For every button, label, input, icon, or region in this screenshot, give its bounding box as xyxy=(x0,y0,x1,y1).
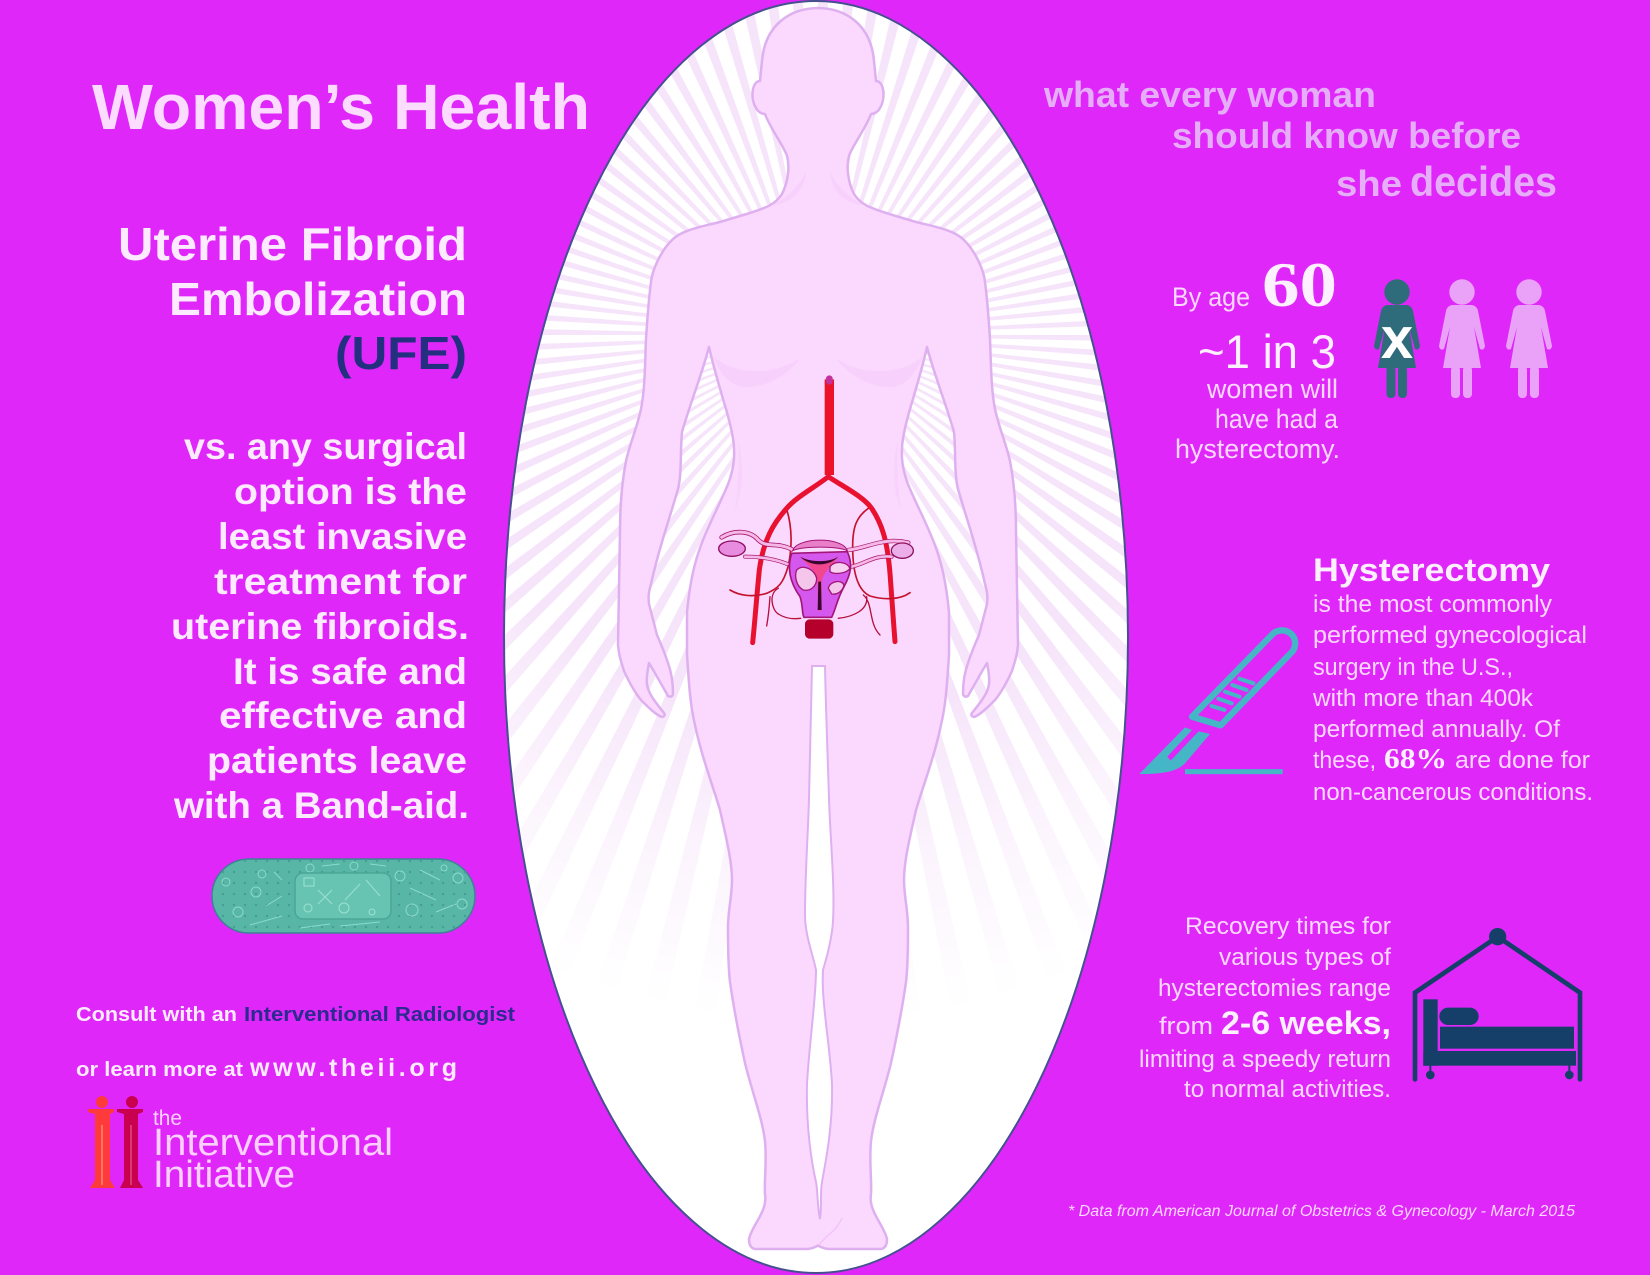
paragraph: least invasive: It is safe and xyxy=(233,651,467,692)
anatomy: aorta, arteries and uterus xyxy=(719,379,913,643)
fallopian tubes xyxy=(722,532,908,567)
body silhouette xyxy=(618,8,1018,1249)
uterus dome xyxy=(793,540,847,551)
logo: the Interventional Initiative xyxy=(88,1096,393,1196)
statistic: 1 in 3: 60 xyxy=(1262,249,1337,320)
text: recovery times: to normal activities. xyxy=(1184,1076,1391,1103)
text: hysterectomy facts: non-cancerous conditions. xyxy=(1313,779,1593,806)
text: hysterectomy facts: Hysterectomy xyxy=(1313,552,1550,588)
gap between the legs xyxy=(805,666,833,1219)
tagline: decides xyxy=(1410,158,1557,205)
text: recovery times xyxy=(1139,913,1391,1103)
statistic: 1 in 3: By age xyxy=(1172,282,1250,312)
logo figures xyxy=(88,1096,143,1188)
icon: scalpel xyxy=(1139,630,1295,774)
cervix xyxy=(805,619,833,639)
text: recovery times: hysterectomies range xyxy=(1158,975,1391,1002)
text: recovery times: from xyxy=(1159,1013,1213,1040)
woman 1: x xyxy=(1381,306,1413,371)
uterine cavity xyxy=(800,557,838,611)
paragraph: least invasive: option is the xyxy=(234,471,467,512)
central oval panel xyxy=(503,0,1129,1274)
heading: UFE: Uterine Fibroid xyxy=(118,218,467,270)
tagline: should know before xyxy=(1172,115,1521,156)
statistic: 1 in 3: have had a xyxy=(1215,404,1339,434)
tagline: what every woman xyxy=(1043,74,1376,115)
paragraph: least invasive: effective and xyxy=(219,695,467,736)
heading: UFE xyxy=(118,218,467,379)
text: hysterectomy facts: performed gynecological xyxy=(1313,622,1587,649)
text: hysterectomy facts xyxy=(1312,552,1593,806)
foot detail xyxy=(819,1218,842,1245)
call to action: Consult with an xyxy=(76,1003,237,1026)
tagline: she xyxy=(1336,163,1402,204)
paragraph: least invasive: least invasive xyxy=(218,516,467,557)
chest and neck shading xyxy=(713,172,923,387)
text: hysterectomy facts: surgery in the U.S., xyxy=(1313,654,1513,681)
text: recovery times: 2-6 weeks, xyxy=(1221,1005,1391,1041)
text: hysterectomy facts: performed annually. Of xyxy=(1313,716,1560,743)
logo: the Interventional Initiative: Initiative xyxy=(153,1154,295,1196)
woman 1 xyxy=(1374,279,1420,398)
text: recovery times: limiting a speedy return xyxy=(1139,1046,1391,1073)
paragraph: least invasive: treatment for xyxy=(214,561,467,602)
logo: the Interventional Initiative: Interventional xyxy=(153,1122,393,1164)
icon: hospital bed xyxy=(1415,928,1580,1079)
icon: band-aid xyxy=(212,859,475,933)
uterus body xyxy=(790,552,851,617)
text: hysterectomy facts: 68% xyxy=(1384,743,1447,775)
paragraph: least invasive: vs. any surgical xyxy=(184,426,467,467)
hip shading xyxy=(735,440,901,510)
ovaries xyxy=(719,541,745,556)
statistic: 1 in 3: ~1 in 3 xyxy=(1198,325,1336,378)
heading: UFE: (UFE) xyxy=(335,327,467,379)
logo: the Interventional Initiative: the xyxy=(153,1107,182,1130)
statistic: 1 in 3: women will xyxy=(1206,374,1338,404)
heading: UFE: Embolization xyxy=(169,273,467,325)
woman 2 xyxy=(1439,279,1485,398)
call to action: www.theii.org xyxy=(249,1054,457,1082)
paragraph: least invasive: with a Band-aid. xyxy=(173,785,469,826)
title: Women’s Health xyxy=(92,71,590,143)
text: hysterectomy facts: these, xyxy=(1313,747,1376,774)
text: hysterectomy facts: are done for xyxy=(1455,747,1590,774)
tagline xyxy=(1043,74,1557,205)
paragraph: least invasive xyxy=(171,426,469,826)
call to action xyxy=(76,1003,515,1082)
statistic: 1 in 3 xyxy=(1172,249,1340,464)
text: hysterectomy facts: with more than 400k xyxy=(1312,685,1534,712)
footnote: * Data from American Journal of Obstetrics & Gynecology - March 2015 xyxy=(1068,1203,1575,1220)
text: hysterectomy facts: is the most commonly xyxy=(1313,591,1553,618)
text: recovery times: Recovery times for xyxy=(1185,913,1391,940)
call to action: Interventional Radiologist xyxy=(244,1003,515,1026)
statistic: 1 in 3: hysterectomy. xyxy=(1175,434,1340,464)
woman 3 xyxy=(1506,279,1552,398)
call to action: or learn more at xyxy=(76,1058,243,1081)
paragraph: least invasive: patients leave xyxy=(207,740,467,781)
aorta and iliac arteries xyxy=(730,379,910,643)
paragraph: least invasive: uterine fibroids. xyxy=(171,606,469,647)
text: recovery times: various types of xyxy=(1219,944,1391,971)
icon: three women, one crossed xyxy=(1374,279,1552,398)
fibroids xyxy=(796,567,817,590)
band-aid pad xyxy=(295,873,391,919)
